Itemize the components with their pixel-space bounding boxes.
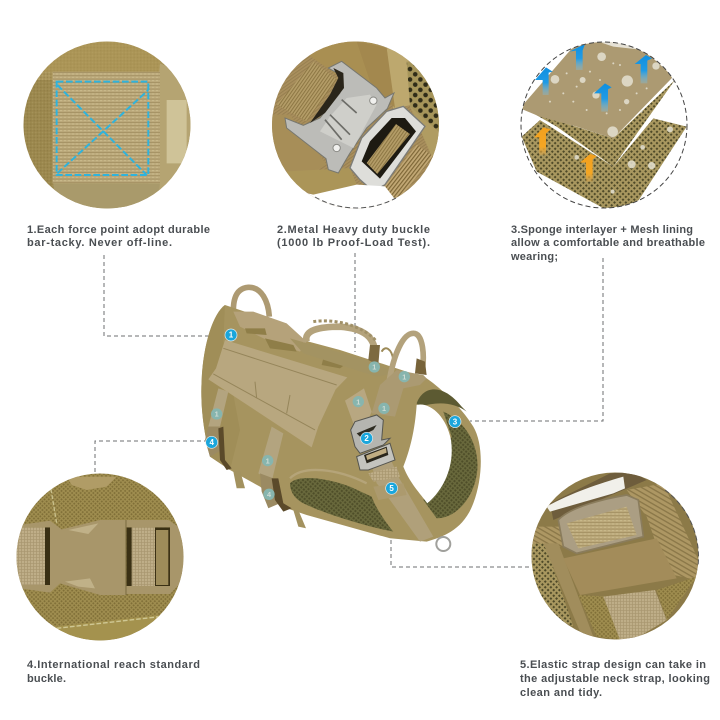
neck opening: [403, 405, 452, 503]
caption 3: [510, 224, 705, 263]
lower ring: [350, 106, 425, 191]
top plate: [285, 61, 394, 173]
neck collar: [417, 389, 467, 412]
caption 1: 1.Each force point adopt durable: [27, 224, 210, 236]
front handle loop: [388, 333, 423, 387]
faded badges: 1: [356, 397, 360, 406]
badge 3: [449, 416, 461, 428]
caption 2: [277, 224, 430, 249]
badge 1: 1: [229, 331, 234, 340]
caption 5: [520, 659, 710, 699]
harness product illustration: [201, 287, 481, 551]
badge 3: 3: [453, 417, 458, 426]
chest strap: [345, 388, 372, 423]
faded badges: 1: [372, 363, 376, 372]
panel: metal buckle detail: [270, 38, 442, 249]
photo: elastic keeper: [530, 470, 700, 642]
faded badges: [211, 361, 410, 500]
white cut-away: [308, 184, 394, 208]
badge 1: [225, 329, 237, 341]
photo: metal buckle: [270, 38, 442, 211]
strap: [277, 61, 337, 121]
badge 4: 4: [209, 438, 214, 447]
caption 4: 4.International reach standard: [27, 659, 200, 671]
caption 1: bar-tacky. Never off-line.: [27, 237, 172, 249]
faded badges: 1: [402, 372, 406, 381]
caption 2: (1000 lb Proof-Load Test).: [277, 237, 430, 249]
top webbing: [233, 312, 307, 352]
panel: elastic strap detail: [520, 470, 710, 699]
dashed ring: [521, 42, 687, 208]
panel: side release buckle detail: [13, 470, 200, 685]
badge 2: 2: [364, 434, 369, 443]
caption 5: clean and tidy.: [520, 687, 602, 699]
dashed arc: [315, 197, 396, 208]
harness body: [201, 305, 481, 542]
belly mesh: [290, 478, 393, 532]
buckle: [351, 415, 395, 470]
top carry handle: [306, 327, 375, 358]
caption 3: wearing;: [510, 251, 558, 263]
faded badges: 1: [266, 456, 270, 465]
faded badges: 1: [382, 404, 386, 413]
panel: bar-tack detail: [20, 37, 210, 249]
caption 5: 5.Elastic strap design can take in: [520, 659, 706, 671]
molle panel: [208, 340, 347, 447]
stitched strip: [387, 48, 412, 110]
caption 3: 3.Sponge interlayer + Mesh lining: [511, 224, 693, 236]
photo: plastic buckle: [13, 470, 187, 643]
back handle loop: [233, 287, 269, 327]
caption 2: 2.Metal Heavy duty buckle: [277, 224, 430, 236]
badges: [206, 329, 461, 500]
panel: sponge and mesh detail: [510, 40, 705, 263]
badge 4: [206, 436, 218, 448]
D ring: [436, 537, 450, 551]
photo: layered fabric: [520, 40, 687, 210]
icons: blue and orange arrows: [534, 44, 652, 182]
mesh patch: [406, 62, 439, 132]
caption 1: [27, 224, 210, 249]
caption 4: [27, 659, 200, 685]
dashed leader lines: [95, 253, 603, 567]
dashed arc: [665, 490, 699, 566]
badge 5: [386, 482, 398, 494]
photo: stitched patch: [24, 42, 190, 208]
faded badges: 1: [215, 410, 219, 419]
caption 3: allow a comfortable and breathable: [511, 237, 705, 249]
caption 4: buckle.: [27, 673, 66, 685]
badge 5: 5: [389, 484, 394, 493]
caption 5: the adjustable neck strap, looking: [520, 673, 710, 685]
faded badges: 4: [267, 490, 272, 499]
badge 2: [361, 432, 373, 444]
side straps: [208, 388, 283, 482]
